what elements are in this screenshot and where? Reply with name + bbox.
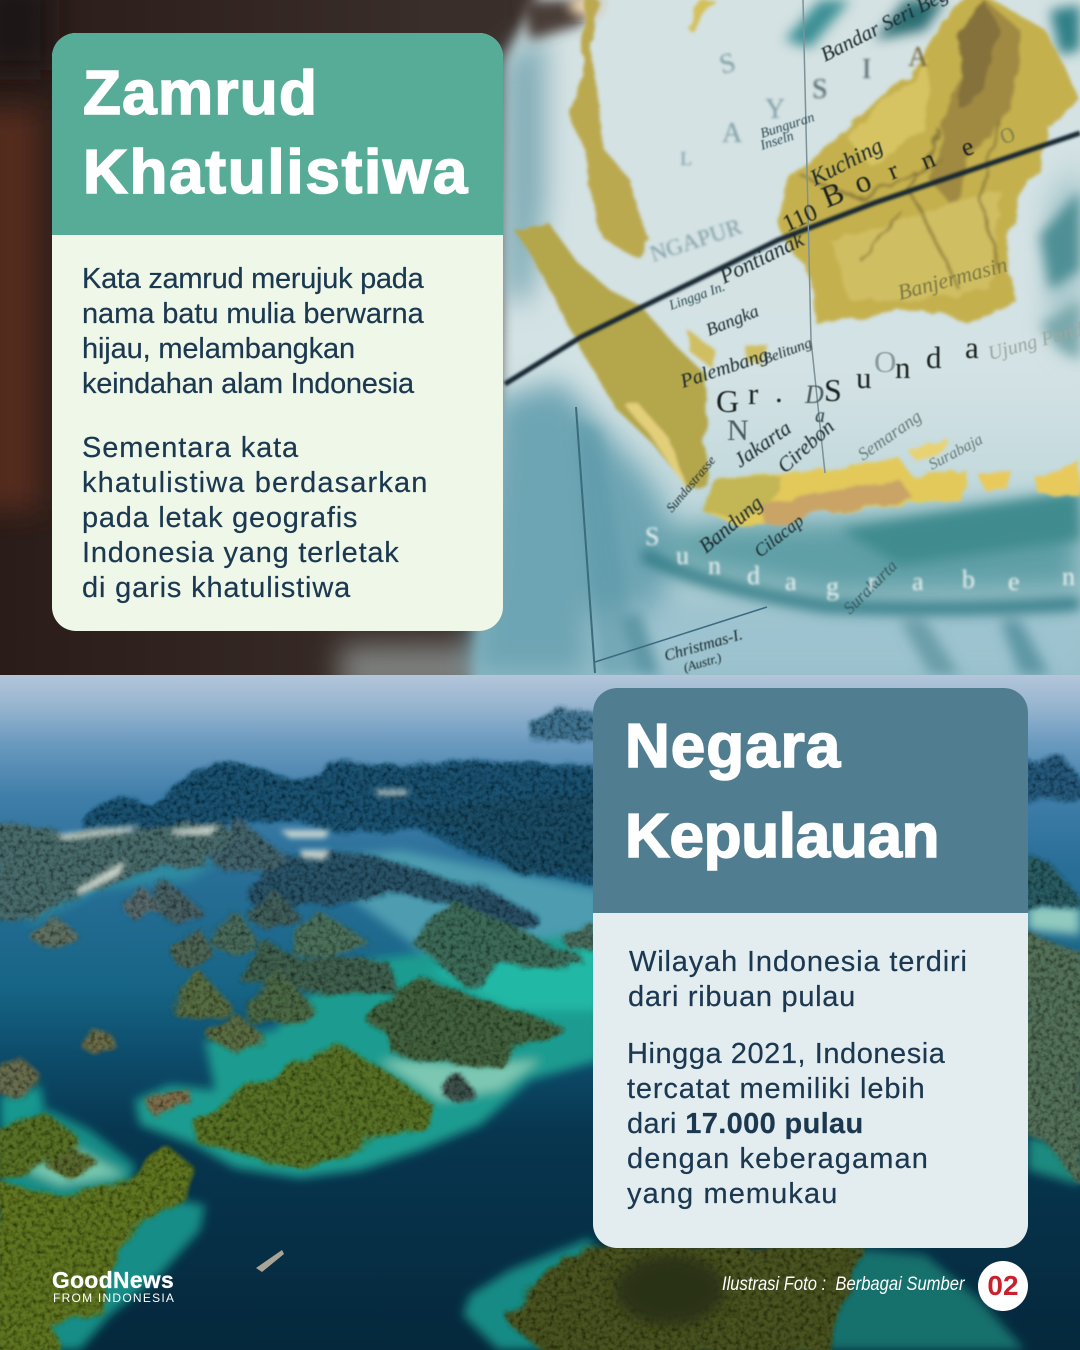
photo: globe map of Indonesia: I: [862, 54, 871, 85]
photo: globe map of Indonesia: S: [812, 74, 828, 105]
map labels: Cilacap: [750, 510, 807, 561]
photo: globe map of Indonesia: u: [856, 360, 872, 395]
text block: meaning of khatulistiwa: [82, 432, 429, 604]
near islands: [0, 885, 1080, 1350]
photo: globe map of Indonesia: Bunguran: [759, 110, 816, 142]
map labels: Palembang: [677, 344, 771, 393]
white sand flats: [55, 790, 410, 895]
map labels: Christmas-I.: [662, 626, 744, 665]
Sunda graben lettering: n: [1062, 562, 1075, 591]
panel: Zamrud Khatulistiwa: [52, 33, 503, 631]
map labels: (Austr.): [682, 650, 723, 675]
map labels: Cirebon: [772, 414, 839, 478]
sea bands: [470, 30, 1080, 675]
reefs and lagoons: [0, 850, 1080, 1350]
Sunda graben lettering: b: [962, 565, 975, 594]
map labels: Sundastrasse: [663, 453, 719, 515]
globe surface: [470, 0, 1080, 700]
heading: Zamrud Khatulistiwa: [83, 59, 469, 207]
photo: globe map of Indonesia: G: [716, 383, 739, 419]
map labels: Belitung: [761, 335, 815, 368]
photo: globe map of Indonesia: B: [817, 174, 849, 214]
photo: globe map of Indonesia: n: [895, 350, 911, 385]
map labels: Bangka: [703, 301, 761, 340]
photo: globe map of Indonesia: A: [722, 118, 743, 149]
logo: GoodNews from Indonesia: GoodNews: [52, 1267, 174, 1293]
map labels: [662, 0, 1080, 675]
logo: GoodNews from Indonesia: [52, 1267, 175, 1305]
photo: globe map of Indonesia: n: [916, 144, 939, 176]
text block: meaning of khatulistiwa: pada letak geografis: [82, 502, 358, 534]
photo: globe map of Indonesia: NGAPUR: [647, 214, 745, 267]
Sunda graben lettering: e: [1008, 567, 1020, 596]
map labels: Semarang: [854, 406, 925, 464]
map labels: Kuching: [805, 133, 887, 191]
text block: 17.000 islands: dari 17.000 pulau: [627, 1108, 864, 1140]
photo: globe map of Indonesia: D: [804, 380, 824, 409]
photo: globe map of Indonesia: r: [883, 155, 903, 186]
heading: Zamrud Khatulistiwa: Khatulistiwa: [83, 138, 469, 207]
photo: globe map of Indonesia: L: [680, 148, 692, 170]
text block: 17.000 islands: Hingga 2021, Indonesia: [627, 1038, 945, 1070]
photo: globe map of Indonesia: S: [716, 47, 739, 81]
Java: [702, 457, 966, 527]
heading: Negara Kepulauan: [625, 712, 939, 871]
Sumatra: [518, 222, 706, 490]
photo: globe map of Indonesia: o: [993, 113, 1020, 151]
text block: meaning of zamrud: [82, 263, 424, 400]
text block: meaning of zamrud: Kata zamrud merujuk pada: [82, 263, 423, 295]
distant and mid islands: [0, 714, 1080, 930]
text block: 17.000 islands: dengan keberagaman: [627, 1143, 929, 1175]
text block: meaning of khatulistiwa: khatulistiwa berdasarkan: [82, 467, 429, 499]
text block: meaning of khatulistiwa: Sementara kata: [82, 432, 299, 464]
Sunda graben lettering: g: [826, 572, 839, 601]
Sunda graben lettering: [645, 522, 1075, 601]
text block: thousands of islands: dari ribuan pulau: [628, 981, 856, 1013]
Sunda graben lettering: n: [708, 551, 721, 580]
text block: thousands of islands: [628, 946, 968, 1013]
Sunda graben lettering: d: [747, 561, 760, 590]
heading band: [52, 33, 503, 235]
photo: globe map of Indonesia: o: [849, 162, 876, 200]
photo: globe map of Indonesia: r: [748, 376, 759, 411]
text block: 17.000 islands: tercatat memiliki lebih: [627, 1073, 926, 1105]
text block: meaning of zamrud: keindahan alam Indonesia: [82, 368, 414, 400]
heading: Zamrud Khatulistiwa: Zamrud: [83, 59, 318, 128]
boat: [256, 1250, 284, 1272]
photo: globe map of Indonesia: a: [815, 405, 825, 427]
photo: globe map of Indonesia: a: [965, 330, 979, 365]
photo: globe map of Indonesia: [0, 0, 1080, 675]
page number badge: 02: [987, 1270, 1019, 1301]
photo: globe map of Indonesia: Inseln: [758, 129, 796, 154]
map labels: Surabaja: [926, 431, 986, 474]
photo: globe map of Indonesia: N: [727, 414, 749, 447]
photo: globe map of Indonesia: Y: [765, 94, 785, 125]
text block: meaning of zamrud: hijau, melambangkan: [82, 333, 355, 365]
map labels: Jakarta: [729, 416, 795, 472]
photo: globe map of Indonesia: 110: [779, 199, 822, 237]
photo: Raja Ampat islands aerial: [0, 675, 1080, 1350]
Sunda graben lettering: u: [676, 541, 689, 570]
photo: globe map of Indonesia: d: [926, 340, 942, 375]
Sunda graben lettering: a: [785, 567, 797, 596]
text block: 17.000 islands: yang memukau: [627, 1178, 838, 1210]
photo: globe map of Indonesia: .: [775, 374, 783, 409]
text block: meaning of zamrud: nama batu mulia berwarna: [82, 298, 424, 330]
heading band: [593, 688, 1028, 913]
photo: globe map of Indonesia: S: [824, 372, 842, 408]
heading: Negara Kepulauan: Negara: [625, 712, 841, 781]
map labels: Surakarta: [839, 556, 901, 618]
panel: Negara Kepulauan: [593, 688, 1028, 1248]
Bangka, Belitung: [688, 330, 715, 368]
map labels: Pontianak: [714, 226, 809, 289]
photo: globe map of Indonesia: e: [956, 131, 978, 163]
photo: globe map of Indonesia: Lingga In.: [666, 280, 727, 314]
Sunda graben lettering: a: [912, 567, 924, 596]
map labels: Bandung: [694, 491, 767, 558]
page number badge: [978, 1261, 1028, 1311]
photo credit: Ilustrasi Foto : Berbagai Sumber: [722, 1274, 964, 1295]
Sunda graben lettering: r: [868, 567, 877, 596]
map grid and equator lines: [505, 133, 1080, 384]
text block: 17.000 islands: [627, 1038, 945, 1210]
dark shadow on bottom island: [615, 1255, 725, 1325]
land masses: [518, 0, 1080, 527]
Borneo: [778, 0, 1080, 323]
text block: thousands of islands: Wilayah Indonesia terdiri: [629, 946, 968, 978]
map labels: Banjermasin: [895, 252, 1010, 305]
Malay peninsula: [570, 0, 650, 258]
logo: GoodNews from Indonesia: FROM INDONESIA: [53, 1291, 175, 1305]
photo: globe map of Indonesia: O: [874, 344, 896, 379]
text block: meaning of khatulistiwa: di garis khatulistiwa: [82, 572, 351, 604]
text block: meaning of khatulistiwa: Indonesia yang terletak: [82, 537, 400, 569]
Sunda graben lettering: S: [645, 522, 659, 551]
heading: Negara Kepulauan: Kepulauan: [625, 802, 939, 871]
photo: globe map of Indonesia: A: [908, 42, 929, 73]
